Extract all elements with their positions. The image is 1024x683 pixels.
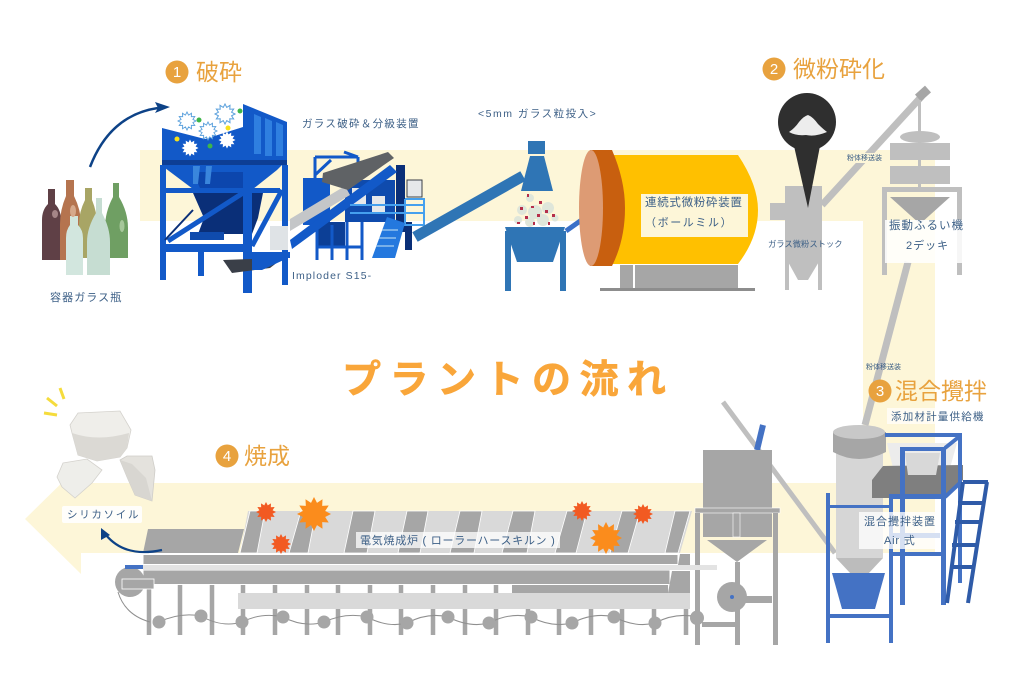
label: additive feeder: 添加材計量供給機 (891, 410, 985, 423)
heading: step 2 fine grinding: 2 (770, 61, 778, 78)
heading: step 3 mixing: 3 (876, 383, 884, 400)
ball mill label: （ボールミル） (645, 216, 733, 229)
ball mill (579, 150, 758, 291)
label: mixer: Air 式 (884, 534, 916, 547)
ladder (947, 482, 988, 603)
conveyor: to ball mill feeder (415, 176, 523, 237)
mixing frame (826, 433, 962, 643)
gray charging hopper (690, 402, 835, 645)
additive feeder (872, 443, 963, 498)
heading: step 1 crushing: 破砕 (196, 59, 242, 85)
label: transfer 1 (845, 153, 883, 163)
powder conveyor pipes (822, 89, 928, 425)
ball mill label (641, 194, 748, 237)
heading: step 4 firing: 焼成 (244, 443, 290, 469)
heading: step 1 crushing: 1 (173, 64, 181, 81)
heading: step 3 mixing: 混合攪拌 (895, 378, 987, 404)
crusher: hopper machine (160, 104, 290, 293)
heading: step 2 fine grinding: 微粉砕化 (793, 56, 885, 82)
heading: step 4 firing (216, 443, 290, 469)
callout: powder (778, 93, 836, 208)
label: silica soil (62, 506, 142, 523)
label: bottles: 容器ガラス瓶 (50, 291, 122, 304)
feeder: hopper with glass granules (505, 141, 583, 291)
heading: step 1 crushing (166, 59, 242, 85)
silica soil rocks (57, 411, 155, 501)
sieve label: 振動ふるい機 (889, 218, 964, 232)
label: feed size: <5mm ガラス粒投入> (478, 107, 597, 120)
label: transfer 2: 粉体移送装 (866, 362, 901, 371)
label: transfer 1: 粉体移送装 (847, 153, 882, 162)
label: stock: ガラス微粉ストック (768, 239, 843, 249)
label: mixer: 混合攪拌装置 (864, 514, 936, 528)
sieve label (885, 218, 964, 263)
heading: step 4 firing: 4 (223, 448, 231, 465)
silo stock tank (770, 186, 822, 290)
label: crusher: ガラス破砕＆分級装置 (302, 117, 420, 130)
ball mill label: 連続式微粉砕装置 (645, 195, 743, 209)
crusher bursts: glass fragments (174, 104, 242, 156)
flow band: process path background (25, 150, 935, 574)
mixing silo (833, 425, 886, 574)
crusher: conveyor and classifier (290, 152, 424, 260)
kiln flames (256, 497, 653, 554)
label: mixer (859, 512, 940, 549)
icon: sparkle marks (44, 388, 64, 415)
arrow: bottles to crusher (90, 102, 170, 167)
label: kiln: 電気焼成炉 ( ローラーハースキルン ) (360, 533, 556, 547)
electric kiln (115, 511, 717, 635)
icon: glass bottles (42, 180, 128, 275)
arrow: kiln to silica soil (101, 528, 162, 552)
vibrating sieve (882, 100, 962, 275)
label: additive feeder (887, 408, 989, 424)
sieve label: 2デッキ (906, 238, 949, 252)
title: プラントの流れ (342, 359, 675, 402)
label: model: Imploder S15- (292, 270, 372, 282)
label: silica soil: シリカソイル (67, 509, 140, 521)
